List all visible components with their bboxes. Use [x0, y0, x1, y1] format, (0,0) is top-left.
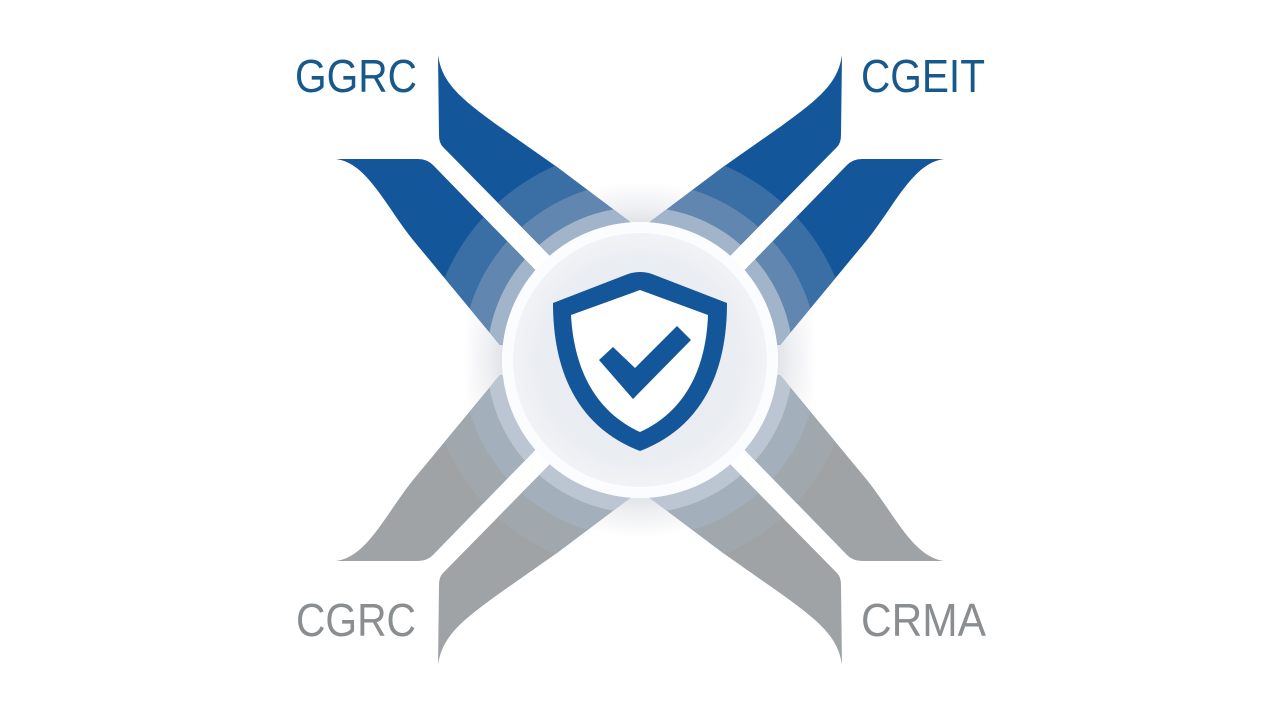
blade: GGRC lower [336, 159, 536, 345]
central disc with white ring [502, 222, 778, 498]
blade: CRMA lower [650, 464, 842, 664]
blade: CGEIT lower [744, 159, 944, 345]
blade: CRMA upper [744, 375, 944, 561]
blade: GGRC upper [438, 55, 630, 256]
blade: CGRC lower [438, 464, 630, 664]
blade: CGRC upper [336, 375, 536, 561]
label: CGEIT: CGEIT [861, 50, 985, 102]
label: GGRC: GGRC [295, 50, 417, 102]
infographic: four certifications around shield [297, 55, 986, 664]
label: CRMA: CRMA [861, 594, 986, 646]
label: CGRC: CGRC [296, 594, 416, 646]
blade: CGEIT upper [650, 55, 842, 256]
icon: shield with check mark [553, 272, 727, 451]
